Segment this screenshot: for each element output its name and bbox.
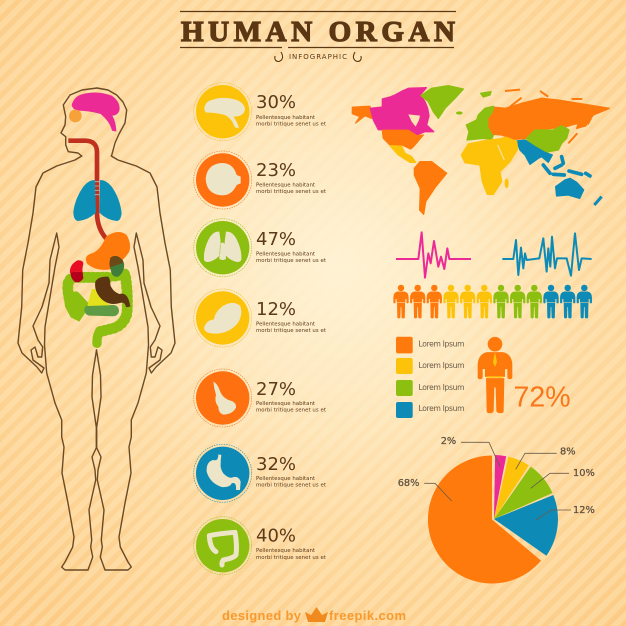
yellow people [443, 285, 492, 318]
legend: Lorem Ipsum [418, 361, 464, 370]
legend [396, 337, 464, 418]
body organs [63, 92, 130, 343]
pie labels: 10% [573, 468, 595, 479]
region: south asia [517, 140, 552, 164]
organ: pituitary [69, 110, 82, 122]
slice: 8% [494, 457, 529, 519]
caption: morbi tritique senet us et [256, 328, 326, 334]
caption [256, 322, 326, 334]
slice: 68% [428, 455, 541, 583]
region: svalbard [481, 92, 491, 97]
value: 23% [256, 160, 296, 181]
icon: intestine [209, 532, 236, 565]
slice: 10% [494, 467, 552, 519]
organ: intestine [68, 274, 127, 343]
icon: liver [204, 303, 241, 334]
caption [256, 183, 326, 195]
item: lungs 47% [194, 219, 326, 277]
pie labels: 68% [398, 478, 419, 489]
legend: Lorem Ipsum [418, 404, 464, 413]
region: russian islands [505, 90, 591, 143]
legend: Lorem Ipsum [418, 340, 464, 349]
caption: morbi tritique senet us et [256, 483, 326, 489]
value: 30% [256, 92, 296, 113]
organ: brain [72, 92, 120, 132]
slice: 12% [494, 495, 558, 556]
caption [256, 401, 326, 414]
caption: morbi tritique senet us et [256, 189, 326, 195]
region: china [527, 126, 569, 152]
stat: 72%: 72% [514, 382, 571, 414]
icon: brain [204, 98, 245, 128]
item: liver 12% [194, 289, 326, 347]
organ: small intestine [90, 293, 113, 328]
organ: pancreas [87, 288, 111, 306]
caption: Pellentesque habitant [256, 401, 315, 407]
region: canada [370, 88, 434, 135]
pie labels: 2% [441, 436, 456, 447]
region: indonesia [543, 157, 590, 176]
organ: esophagus [68, 141, 106, 238]
title swirls [275, 52, 361, 62]
region: europe [466, 106, 494, 140]
caption: morbi tritique senet us et [256, 122, 326, 128]
world map [352, 86, 609, 214]
organ: overlap lower [110, 263, 124, 277]
subtitle: INFOGRAPHIC [289, 53, 347, 61]
title [180, 12, 456, 62]
caption: Pellentesque habitant [256, 183, 315, 189]
heartbeat line: pink [396, 232, 471, 278]
legend: Lorem Ipsum [418, 383, 464, 392]
region: russia [489, 98, 609, 139]
region: madagascar [505, 178, 509, 188]
caption: morbi tritique senet us et [256, 555, 326, 561]
organ: kidney [71, 272, 83, 282]
caption: Pellentesque habitant [256, 252, 315, 258]
pie labels: 12% [573, 505, 595, 516]
value: 47% [256, 229, 296, 250]
region: hudson bay [408, 114, 420, 127]
footer credit: freepik.com [329, 608, 406, 623]
icon: pancreas [213, 382, 236, 415]
caption [256, 252, 326, 264]
pie chart [398, 436, 595, 583]
caption [256, 476, 326, 489]
value: 32% [256, 454, 296, 475]
caption: morbi tritique senet us et [256, 258, 326, 264]
icon: crown [305, 607, 328, 622]
region: australia [556, 178, 584, 198]
region: south america [414, 162, 447, 214]
slice: 2% [494, 455, 506, 519]
value: 12% [256, 299, 296, 320]
organ: intestine lower blob [63, 293, 85, 322]
value: 40% [256, 526, 296, 547]
item: stomach 32% [194, 444, 326, 502]
caption: morbi tritique senet us et [256, 408, 326, 414]
icon: stomach [207, 454, 241, 490]
value: 27% [256, 379, 296, 400]
item: intestine 40% [194, 517, 326, 575]
green people [493, 285, 542, 318]
region: usa [382, 130, 423, 149]
leader lines [424, 442, 571, 520]
region: iceland [456, 111, 463, 115]
caption: Pellentesque habitant [256, 322, 315, 328]
item: pancreas 27% [194, 369, 326, 427]
caption [256, 115, 326, 128]
organ: lungs [73, 180, 122, 221]
organ: kidney upper [70, 260, 83, 273]
region: africa [461, 137, 518, 194]
organ: gallbladder overlap [109, 256, 124, 268]
caption: Pellentesque habitant [256, 476, 315, 482]
icon: lungs [204, 232, 241, 262]
organ: stomach [95, 277, 130, 307]
caption [256, 548, 326, 561]
heartbeat line: blue [502, 233, 592, 276]
title text: HUMAN ORGAN [181, 16, 455, 48]
people row [393, 285, 592, 318]
caption: Pellentesque habitant [256, 115, 315, 121]
icon: eye [206, 163, 241, 195]
pie labels: 8% [560, 446, 576, 457]
region: greenland [421, 86, 463, 118]
organ: trachea detail [95, 182, 99, 195]
orange people [393, 285, 442, 318]
organ: liver [86, 232, 130, 270]
footer credit: designed by [222, 608, 302, 623]
footer credit [222, 607, 406, 623]
item: eye 23% [194, 151, 326, 209]
region: central america [390, 146, 416, 162]
region: red sea [498, 145, 504, 160]
caption: Pellentesque habitant [256, 548, 315, 554]
human body outline [18, 88, 175, 570]
region: new zealand [594, 197, 602, 205]
blue people [543, 285, 592, 318]
item: brain 30% [194, 83, 326, 141]
pie labels [398, 436, 595, 516]
region: alaska [352, 106, 372, 123]
large person icon [478, 337, 512, 413]
